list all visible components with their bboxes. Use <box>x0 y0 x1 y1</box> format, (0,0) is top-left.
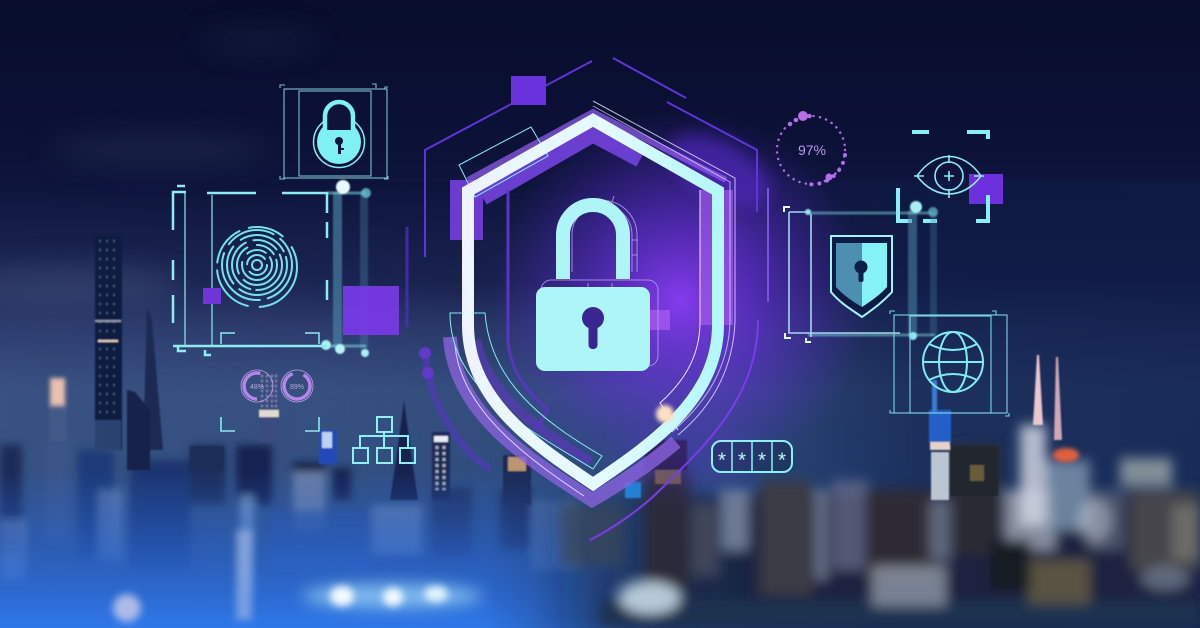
left arc dots <box>419 347 434 379</box>
left skyline buildings <box>0 440 580 595</box>
network hierarchy icon <box>353 417 415 463</box>
corner brackets <box>221 417 319 431</box>
password field: * <box>718 449 726 472</box>
purple squares <box>203 286 399 335</box>
padlock keyhole <box>582 307 604 349</box>
password field: * <box>738 449 746 472</box>
purple square top <box>511 76 546 105</box>
globe icon <box>923 332 983 392</box>
gauge 89 percent: 89% <box>290 384 304 391</box>
padlock body <box>536 287 650 371</box>
shield main outline <box>468 120 718 484</box>
frame lines <box>784 207 900 342</box>
gauge 48 percent: 48% <box>250 384 264 391</box>
fingerprint panel <box>173 180 399 357</box>
fingerprint icon <box>217 227 297 307</box>
fingerprint frame lines <box>173 186 327 355</box>
glowing blue floor <box>0 478 638 628</box>
frame lines <box>280 84 388 179</box>
eye <box>914 155 984 198</box>
shield wireframe lines <box>450 101 735 496</box>
right skyline base <box>540 425 1200 628</box>
frame bars and dots <box>321 180 371 357</box>
purple shield bands <box>450 112 733 500</box>
frame lines <box>890 311 1009 416</box>
percentage gauges <box>241 368 315 404</box>
shield icon <box>831 236 892 317</box>
padlock shackle <box>563 205 623 279</box>
eye scan icon <box>898 132 1003 221</box>
scan brackets <box>898 132 988 221</box>
password field: * <box>778 449 786 472</box>
97 percent dotted ring <box>777 111 845 184</box>
97 percent dotted ring: 97% <box>798 142 826 158</box>
main shield <box>450 101 735 500</box>
shield panel <box>784 201 938 342</box>
globe panel <box>890 311 1009 416</box>
blurred city skyline <box>0 235 1200 628</box>
outer purple hexagon lines <box>407 58 768 540</box>
purple square <box>969 174 1003 204</box>
left towers with lights <box>49 235 531 505</box>
right towers with lights <box>625 355 1079 500</box>
small padlock panel <box>280 84 388 179</box>
purple glow behind shield <box>490 110 870 490</box>
flare on shield <box>656 405 674 423</box>
password field <box>712 441 792 472</box>
small padlock icon <box>314 102 364 168</box>
central padlock <box>536 196 658 371</box>
padlock wireframe <box>541 196 658 366</box>
frame bars and dots <box>805 201 938 340</box>
password field: * <box>758 449 766 472</box>
